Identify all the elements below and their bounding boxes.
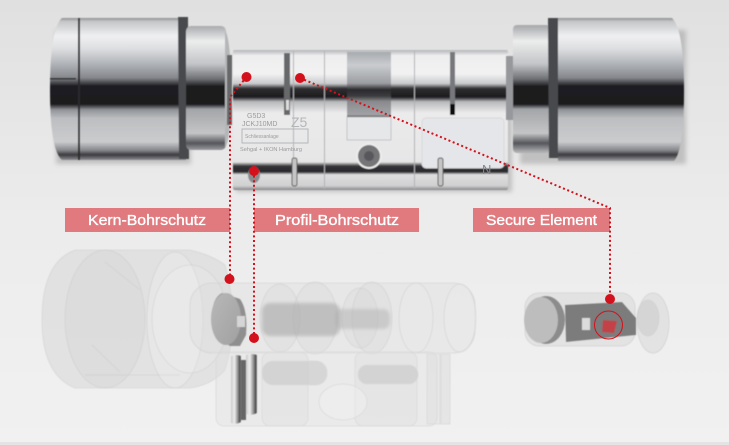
engraving: JCKJ10MD <box>242 121 277 128</box>
lock cylinder photo <box>50 17 686 192</box>
circuit board <box>565 302 636 342</box>
label: Kern-Bohrschutz: Kern-Bohrschutz <box>88 213 206 229</box>
left knob <box>50 17 232 160</box>
callout line: Profil-Bohrschutz <box>249 166 259 343</box>
chip <box>602 320 617 333</box>
ghost left knob <box>42 250 232 388</box>
chip ring <box>594 311 622 339</box>
ghost internals <box>262 303 390 336</box>
ghost lower body <box>216 352 450 426</box>
right knob <box>506 18 684 161</box>
engraving: Schliessanlage <box>245 134 279 140</box>
cylinder core <box>233 50 508 190</box>
engraving: Z5 <box>291 114 308 130</box>
engraving <box>240 113 491 177</box>
steel pins <box>231 354 257 424</box>
callout line: Kern-Bohrschutz <box>224 72 252 284</box>
label: Profil-Bohrschutz: Profil-Bohrschutz <box>275 213 399 229</box>
engraving: Sehgal + IKON Hamburg <box>240 147 302 153</box>
engraving: N <box>482 162 491 177</box>
secure element module <box>524 293 669 353</box>
shadow <box>56 30 686 192</box>
label: Secure Element <box>473 208 610 232</box>
callout line: Secure Element <box>295 73 615 304</box>
anti-drill disc <box>211 293 246 346</box>
ghost lock exploded view <box>42 250 476 426</box>
ghost housing <box>525 293 669 353</box>
label: Secure Element: Secure Element <box>486 213 597 229</box>
disc face <box>527 296 565 344</box>
ghost upper body <box>190 282 476 354</box>
label: Kern-Bohrschutz <box>65 208 230 232</box>
label: Profil-Bohrschutz <box>254 208 419 232</box>
engraving: G5D3 <box>247 113 265 120</box>
